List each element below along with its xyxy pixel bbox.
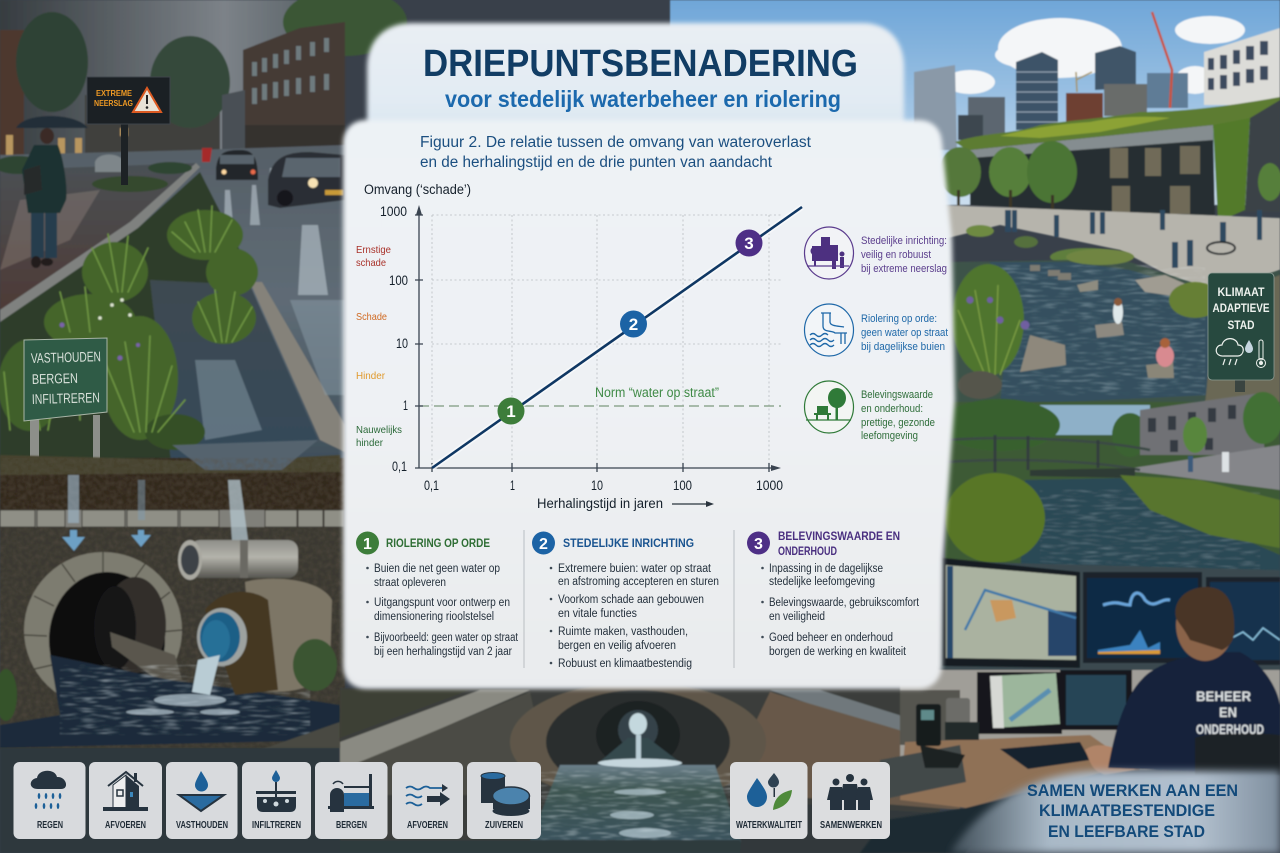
card: waterkwaliteit <box>730 762 808 839</box>
card: vasthouden: VASTHOUDEN <box>176 820 228 831</box>
column 1: riolering op orde: RIOLERING OP ORDE <box>386 538 490 550</box>
column 2: stedelijke inrichting: en vitale functies <box>558 608 637 620</box>
scene: tunnel and river <box>0 682 960 853</box>
chart: omvang versus herhalingstijd: 100 <box>673 478 692 493</box>
scene: pond with stepping stones <box>950 249 1280 405</box>
pedestrian with umbrella <box>16 116 88 268</box>
column 3: belevingswaarde en onderhoud: borgen de werking en kwaliteit <box>769 646 907 658</box>
scene: city with green roof <box>670 0 1280 300</box>
legend: three points of attention: bij dagelijkse buien <box>861 341 945 353</box>
chart: omvang versus herhalingstijd: Hinder <box>356 370 385 382</box>
column 2: stedelijke inrichting: Ruimte maken, vasthouden, <box>558 626 688 638</box>
sign: vasthouden bergen infiltreren: VASTHOUDEN <box>31 348 101 366</box>
subtitle: voor stedelijk waterbeheer en riolering <box>445 86 841 112</box>
sign: klimaat adaptieve stad: KLIMAAT <box>1218 285 1265 299</box>
legend: three points of attention: en onderhoud: <box>861 403 923 415</box>
column 1: riolering op orde: 1 <box>363 536 372 553</box>
card: bergen: BERGEN <box>336 820 367 831</box>
card: afvoeren: AFVOEREN <box>105 820 146 831</box>
column 2: stedelijke inrichting: en afstroming accepteren en sturen <box>558 576 719 588</box>
chart: omvang versus herhalingstijd: Schade <box>356 311 387 323</box>
banner: samen werken: KLIMAATBESTENDIGE <box>1039 802 1215 820</box>
card: regen: REGEN <box>37 820 63 831</box>
column 1: riolering op orde: Bijvoorbeeld: geen water op straat <box>374 632 519 644</box>
chart: omvang versus herhalingstijd: 10 <box>396 336 408 351</box>
column 3: belevingswaarde en onderhoud: stedelijke leefomgeving <box>769 576 875 588</box>
chart: omvang versus herhalingstijd: 0,1 <box>424 478 439 493</box>
figure caption: Figuur 2. De relatie tussen de omvang van wateroverlast <box>420 134 812 151</box>
column 1: riolering op orde: bij een herhalingstijd van 2 jaar <box>374 646 512 658</box>
banner: samen werken: SAMEN WERKEN AAN EEN <box>1027 782 1238 800</box>
chart: omvang versus herhalingstijd: 100 <box>389 273 408 288</box>
legend: three points of attention: bij extreme neerslag <box>861 263 947 275</box>
plants <box>0 210 258 450</box>
chart: omvang versus herhalingstijd: 1000 <box>380 204 407 219</box>
chart: omvang versus herhalingstijd: 1 <box>510 478 515 493</box>
column 2: stedelijke inrichting: Voorkom schade aan gebouwen <box>558 594 704 606</box>
scene: underground sewers and pipes <box>0 440 345 750</box>
column 1: riolering op orde: Buien die net geen water op <box>374 563 500 575</box>
sign: klimaat adaptieve stad: STAD <box>1228 318 1255 332</box>
card: infiltreren: INFILTREREN <box>252 820 301 831</box>
column 3: belevingswaarde en onderhoud: ONDERHOUD <box>778 546 837 558</box>
legend: three points of attention: Riolering op orde: <box>861 313 937 325</box>
column 1: riolering op orde <box>356 532 519 658</box>
column 1: riolering op orde: Uitgangspunt voor ontwerp en <box>374 597 510 609</box>
card: infiltreren <box>242 762 311 839</box>
column 2: stedelijke inrichting: STEDELIJKE INRICHTING <box>563 538 694 550</box>
chart: omvang versus herhalingstijd: 10 <box>591 478 603 493</box>
card: zuiveren <box>467 762 541 839</box>
banner: samen werken: EN LEEFBARE STAD <box>1048 823 1205 841</box>
chart: omvang versus herhalingstijd: hinder <box>356 437 383 449</box>
column 2: stedelijke inrichting <box>532 532 719 670</box>
sign: vasthouden bergen infiltreren: INFILTREREN <box>32 389 100 407</box>
card: bergen <box>315 762 388 839</box>
sign: vasthouden bergen infiltreren <box>24 338 107 467</box>
column 1: riolering op orde: straat opleveren <box>374 577 446 589</box>
chart: omvang versus herhalingstijd: 1 <box>403 398 408 413</box>
icon: warning sign extreme neerslag <box>87 77 170 185</box>
figure caption: en de herhalingstijd en de drie punten van aandacht <box>420 154 773 171</box>
scene: control room: EN <box>1219 705 1237 720</box>
cars <box>216 150 258 180</box>
chart: omvang versus herhalingstijd <box>356 182 802 511</box>
column 3: belevingswaarde en onderhoud: en veiligheid <box>769 611 825 623</box>
icon: warning sign extreme neerslag: NEERSLAG <box>94 99 133 108</box>
legend: three points of attention: Stedelijke inrichting: <box>861 235 947 247</box>
sign: vasthouden bergen infiltreren: BERGEN <box>32 370 78 387</box>
column 3: belevingswaarde en onderhoud: Goed beheer en onderhoud <box>769 632 893 644</box>
icon: warning sign extreme neerslag: EXTREME <box>96 89 133 98</box>
legend: three points of attention: geen water op straat <box>861 327 948 339</box>
main panel <box>343 120 955 689</box>
chart: omvang versus herhalingstijd: schade <box>356 257 386 269</box>
title: DRIEPUNTSBENADERING <box>423 43 858 85</box>
card: regen <box>14 762 86 839</box>
marker 1: 1 <box>506 402 516 421</box>
legend: three points of attention: veilig en robuust <box>861 249 931 261</box>
scene: control room <box>860 558 1280 853</box>
card: afvoeren <box>89 762 162 839</box>
legend: three points of attention: leefomgeving <box>861 430 918 442</box>
legend: three points of attention: Belevingswaarde <box>861 389 933 401</box>
card: afvoeren tweede <box>392 762 463 839</box>
card: samenwerken <box>812 762 890 839</box>
column 3: belevingswaarde en onderhoud <box>747 531 920 658</box>
banner: samen werken <box>950 771 1280 853</box>
column 2: stedelijke inrichting: 2 <box>539 536 548 553</box>
chart: omvang versus herhalingstijd: Omvang (‘schade’) <box>364 182 471 197</box>
column 1: riolering op orde: dimensionering rioolstelsel <box>374 611 494 623</box>
chart: omvang versus herhalingstijd: Norm “water op straat” <box>595 385 719 400</box>
column 2: stedelijke inrichting: bergen en veilig afvoeren <box>558 640 676 652</box>
marker 2: 2 <box>629 315 638 334</box>
card: samenwerken: SAMENWERKEN <box>820 820 882 831</box>
card: zuiveren: ZUIVEREN <box>485 820 523 831</box>
marker 1 <box>498 398 524 424</box>
marker 3 <box>736 230 762 256</box>
scene: canal with footbridge <box>940 392 1280 577</box>
chart: omvang versus herhalingstijd: Ernstige <box>356 244 391 256</box>
marker 3: 3 <box>744 234 754 253</box>
legend: three points of attention: prettige, gezonde <box>861 417 935 429</box>
column 3: belevingswaarde en onderhoud: Belevingswaarde, gebruikscomfort <box>769 597 920 609</box>
icon: park bench and tree <box>804 381 854 433</box>
marker 2 <box>620 310 647 338</box>
icon: urban layout <box>804 227 854 279</box>
card: afvoeren tweede: AFVOEREN <box>407 820 448 831</box>
column 2: stedelijke inrichting: Extremere buien: water op straat <box>558 563 712 575</box>
chart: omvang versus herhalingstijd: Herhalingstijd in jaren <box>537 496 663 511</box>
column 3: belevingswaarde en onderhoud: Inpassing in de dagelijkse <box>769 563 883 575</box>
title panel <box>367 23 904 150</box>
column 2: stedelijke inrichting: Robuust en klimaatbestendig <box>558 658 692 670</box>
scene: control room: BEHEER <box>1196 689 1251 704</box>
chart: omvang versus herhalingstijd: 0,1 <box>392 459 407 474</box>
icon: sewer pipe and water <box>804 304 854 356</box>
figure caption <box>420 134 812 171</box>
card: vasthouden <box>166 762 238 839</box>
chart: omvang versus herhalingstijd: 1000 <box>756 478 783 493</box>
chart: omvang versus herhalingstijd: Nauwelijks <box>356 424 402 436</box>
column 3: belevingswaarde en onderhoud: BELEVINGSWAARDE EN <box>778 531 900 543</box>
legend: three points of attention <box>804 227 948 442</box>
scene: rainy street with wadi <box>0 0 407 470</box>
card: waterkwaliteit: WATERKWALITEIT <box>736 820 802 831</box>
column 3: belevingswaarde en onderhoud: 3 <box>754 536 763 553</box>
sign: klimaat adaptieve stad: ADAPTIEVE <box>1212 301 1270 315</box>
sign: klimaat adaptieve stad <box>1208 273 1274 392</box>
